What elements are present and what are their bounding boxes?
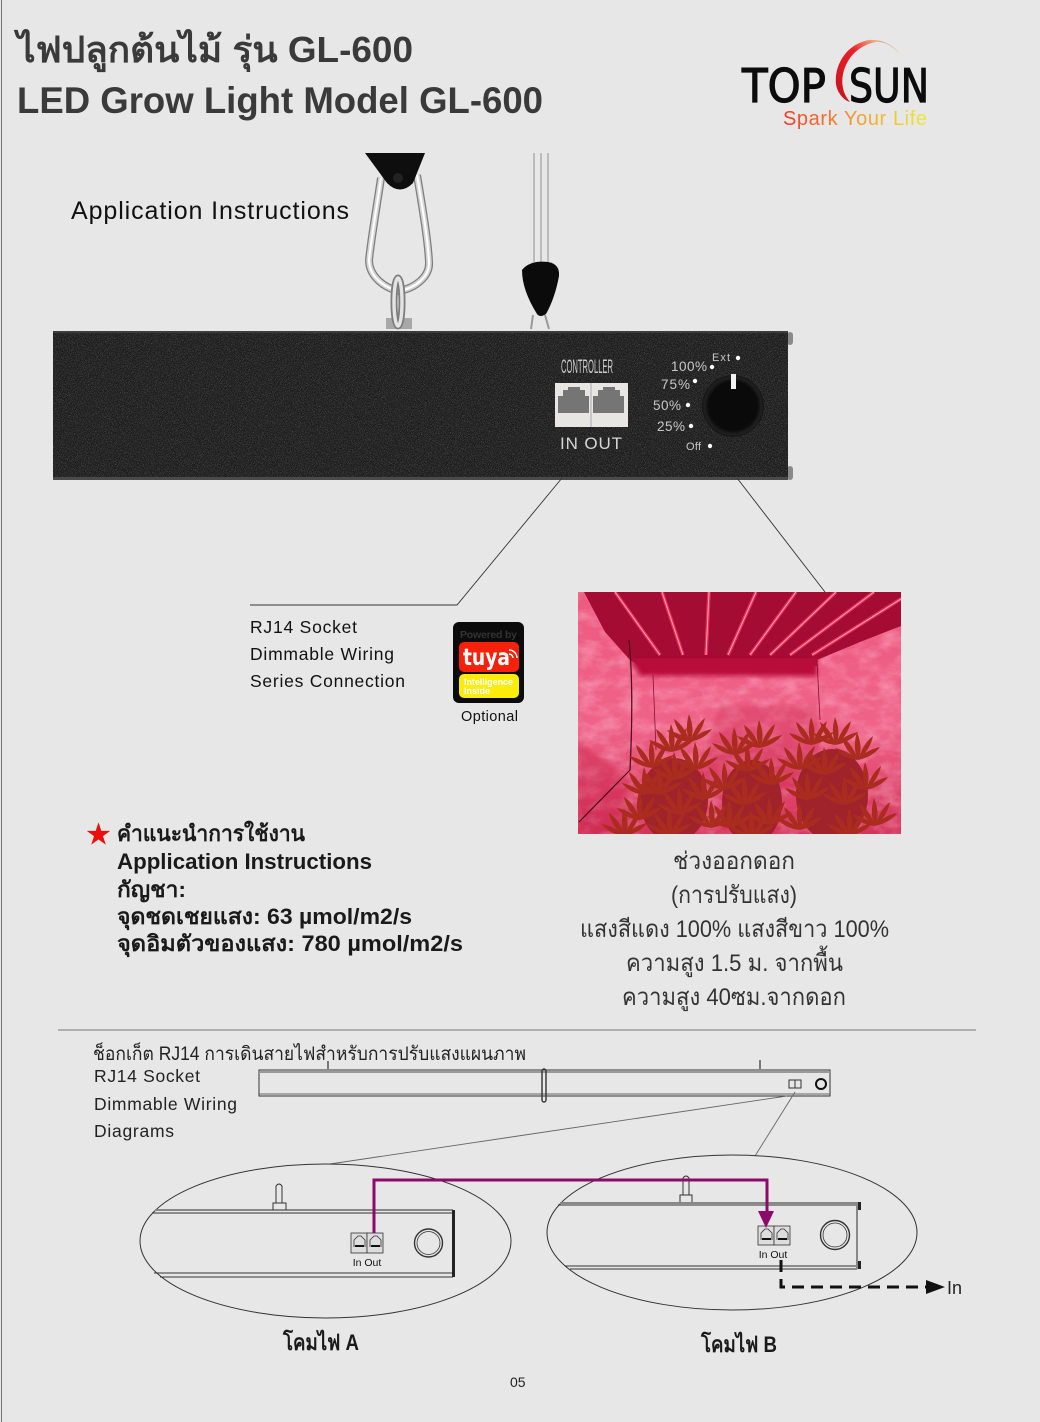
light fixture bar: CONTROLLER bbox=[561, 357, 613, 378]
dimmer scale: 75% bbox=[661, 377, 690, 392]
seams bbox=[579, 640, 632, 822]
tuya badge: Intelligence bbox=[464, 677, 513, 687]
logo: Top Sun: Spark Your Life bbox=[783, 108, 927, 130]
photo caption: ช่วงออกดอก bbox=[673, 848, 795, 875]
led strips bbox=[615, 592, 912, 655]
wiring heading: Dimmable Wiring bbox=[94, 1094, 237, 1114]
wiring heading bbox=[93, 1041, 526, 1141]
lamp labels: โคมไฟ B bbox=[700, 1331, 777, 1357]
photo caption: ความสูง 40ซม.จากดอก bbox=[622, 984, 846, 1012]
instructions block: กัญชา: bbox=[117, 877, 186, 903]
photo caption: ความสูง 1.5 ม. จากพื้น bbox=[626, 945, 843, 978]
wiring heading: ช็อกเก็ต RJ14 การเดินสายไฟสำหรับการปรับแสงแผนภาพ bbox=[93, 1041, 526, 1065]
instructions block: จุดอิมตัวของแสง: 780 µmol/m2/s bbox=[117, 931, 463, 958]
carabiner hanger bbox=[365, 153, 429, 329]
ceiling bbox=[584, 592, 901, 666]
dimmer knob bbox=[702, 374, 764, 437]
instructions block: Application Instructions bbox=[117, 849, 372, 874]
tuya badge bbox=[453, 622, 524, 725]
socket features text: Dimmable Wiring bbox=[250, 644, 394, 664]
instructions block bbox=[86, 820, 463, 958]
socket features text: RJ14 Socket bbox=[250, 617, 357, 637]
photo: grow tent under red light bbox=[578, 592, 912, 844]
dimmer scale: Ext bbox=[712, 352, 730, 364]
instructions block: จุดชดเชยแสง: 63 µmol/m2/s bbox=[117, 904, 412, 931]
light fixture bar: IN OUT bbox=[560, 434, 622, 453]
logo: Top Sun: SUN bbox=[849, 59, 929, 113]
full fixture outline bbox=[259, 1060, 830, 1102]
tent wall texture bbox=[578, 592, 901, 834]
title: ไฟปลูกต้นไม้ รุ่น GL-600 bbox=[13, 28, 413, 73]
lamp labels: โคมไฟ A bbox=[282, 1329, 359, 1355]
lamp labels bbox=[282, 1329, 777, 1357]
icon: red star: ★ bbox=[86, 821, 111, 849]
photo caption: แสงสีแดง 100% แสงสีขาว 100% bbox=[580, 916, 889, 943]
dimmer scale: 100% bbox=[671, 359, 707, 374]
arrow: dashed input line: In bbox=[947, 1278, 962, 1298]
socket features text: Series Connection bbox=[250, 671, 405, 691]
heading: application instructions: Application Instructions bbox=[71, 197, 349, 225]
title: LED Grow Light Model GL-600 bbox=[17, 80, 543, 121]
panel: lamp A detail: In Out bbox=[353, 1257, 381, 1269]
instructions block: คำแนะนำการใช้งาน bbox=[117, 820, 305, 846]
hanging wire and black clip bbox=[522, 153, 559, 329]
callout lines bbox=[250, 478, 825, 605]
panel: lamp B detail bbox=[547, 1155, 917, 1310]
tuya badge: Inside bbox=[464, 686, 490, 696]
light fixture bar bbox=[53, 331, 793, 480]
arrow: purple link from lamp A out to lamp B in bbox=[374, 1180, 774, 1233]
title bbox=[13, 28, 543, 121]
logo: Top Sun bbox=[741, 40, 929, 130]
wiring heading: RJ14 Socket bbox=[94, 1066, 200, 1086]
tuya badge: Powered by bbox=[460, 629, 517, 641]
dimmer scale: 25% bbox=[657, 419, 685, 434]
wiring heading: Diagrams bbox=[94, 1121, 174, 1141]
dimmer scale bbox=[653, 352, 730, 453]
socket ports bbox=[555, 383, 628, 427]
panel: lamp B detail: In Out bbox=[759, 1249, 787, 1261]
socket features text bbox=[250, 617, 405, 691]
plants bbox=[602, 714, 897, 844]
panel: lamp A detail bbox=[140, 1164, 511, 1318]
dimmer scale: Off bbox=[686, 441, 702, 453]
tuya badge: Optional bbox=[461, 709, 518, 725]
arrow: dashed input line bbox=[781, 1260, 962, 1298]
page number: 05 bbox=[510, 1374, 526, 1390]
photo caption bbox=[580, 848, 889, 1012]
photo caption: (การปรับแสง) bbox=[671, 882, 797, 909]
zoom guide lines bbox=[330, 1092, 795, 1164]
dimmer scale: 50% bbox=[653, 398, 681, 413]
tuya badge: tuya bbox=[463, 645, 510, 671]
logo: Top Sun: TOP bbox=[741, 59, 826, 113]
